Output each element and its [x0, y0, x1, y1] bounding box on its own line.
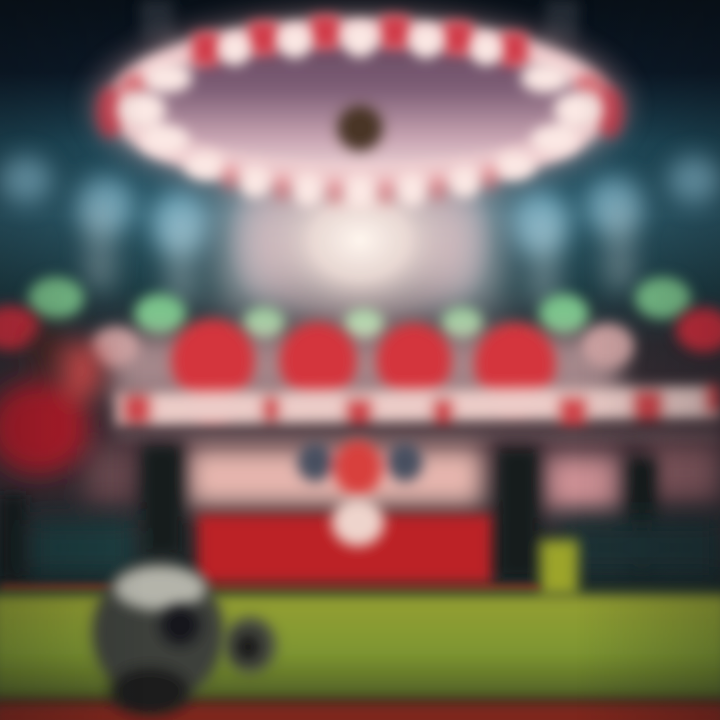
pale mid band behind the red discs: [110, 335, 620, 397]
central dark hub: [337, 105, 383, 151]
overhead lighting ring: [96, 15, 624, 209]
left red figure: [0, 328, 102, 474]
green lamps row: [28, 277, 691, 339]
side pink lamps: [91, 324, 634, 368]
ball lower shadow: [110, 668, 190, 716]
thin red line at pitch edge: [0, 584, 540, 590]
striped red and white banner: [115, 384, 720, 426]
broad bright beams around centre: [225, 185, 495, 310]
dark pillars: [0, 445, 656, 580]
red track at the bottom: [0, 702, 720, 720]
central light glow: [225, 130, 495, 350]
podium front highlight: [332, 498, 384, 546]
small ball dark patch: [236, 634, 260, 660]
light beams below the ring: [85, 205, 635, 305]
ring interior: [125, 29, 595, 181]
stadium floodlights in the blue band: [0, 156, 720, 254]
ring outer glow: [98, 17, 622, 193]
central podium figures: [297, 440, 423, 496]
yellow-green post: [540, 540, 578, 595]
dark teal lower stands: [30, 520, 720, 575]
small second ball: [224, 617, 276, 673]
stand panels: [85, 445, 720, 510]
ring white lamps: [118, 23, 602, 209]
dark beam under banner: [115, 430, 720, 442]
red stage block: [197, 514, 493, 584]
ball highlight: [114, 566, 206, 610]
side red lamps: [0, 306, 720, 352]
ring red segments: [96, 15, 624, 138]
red discs row: [171, 319, 556, 420]
ring lower red accents: [221, 165, 499, 205]
soccer ball: [92, 562, 276, 716]
football pitch: [0, 594, 720, 700]
ball dark patch: [160, 605, 200, 645]
hanging cables: [140, 0, 579, 40]
ring base halo: [120, 31, 600, 179]
